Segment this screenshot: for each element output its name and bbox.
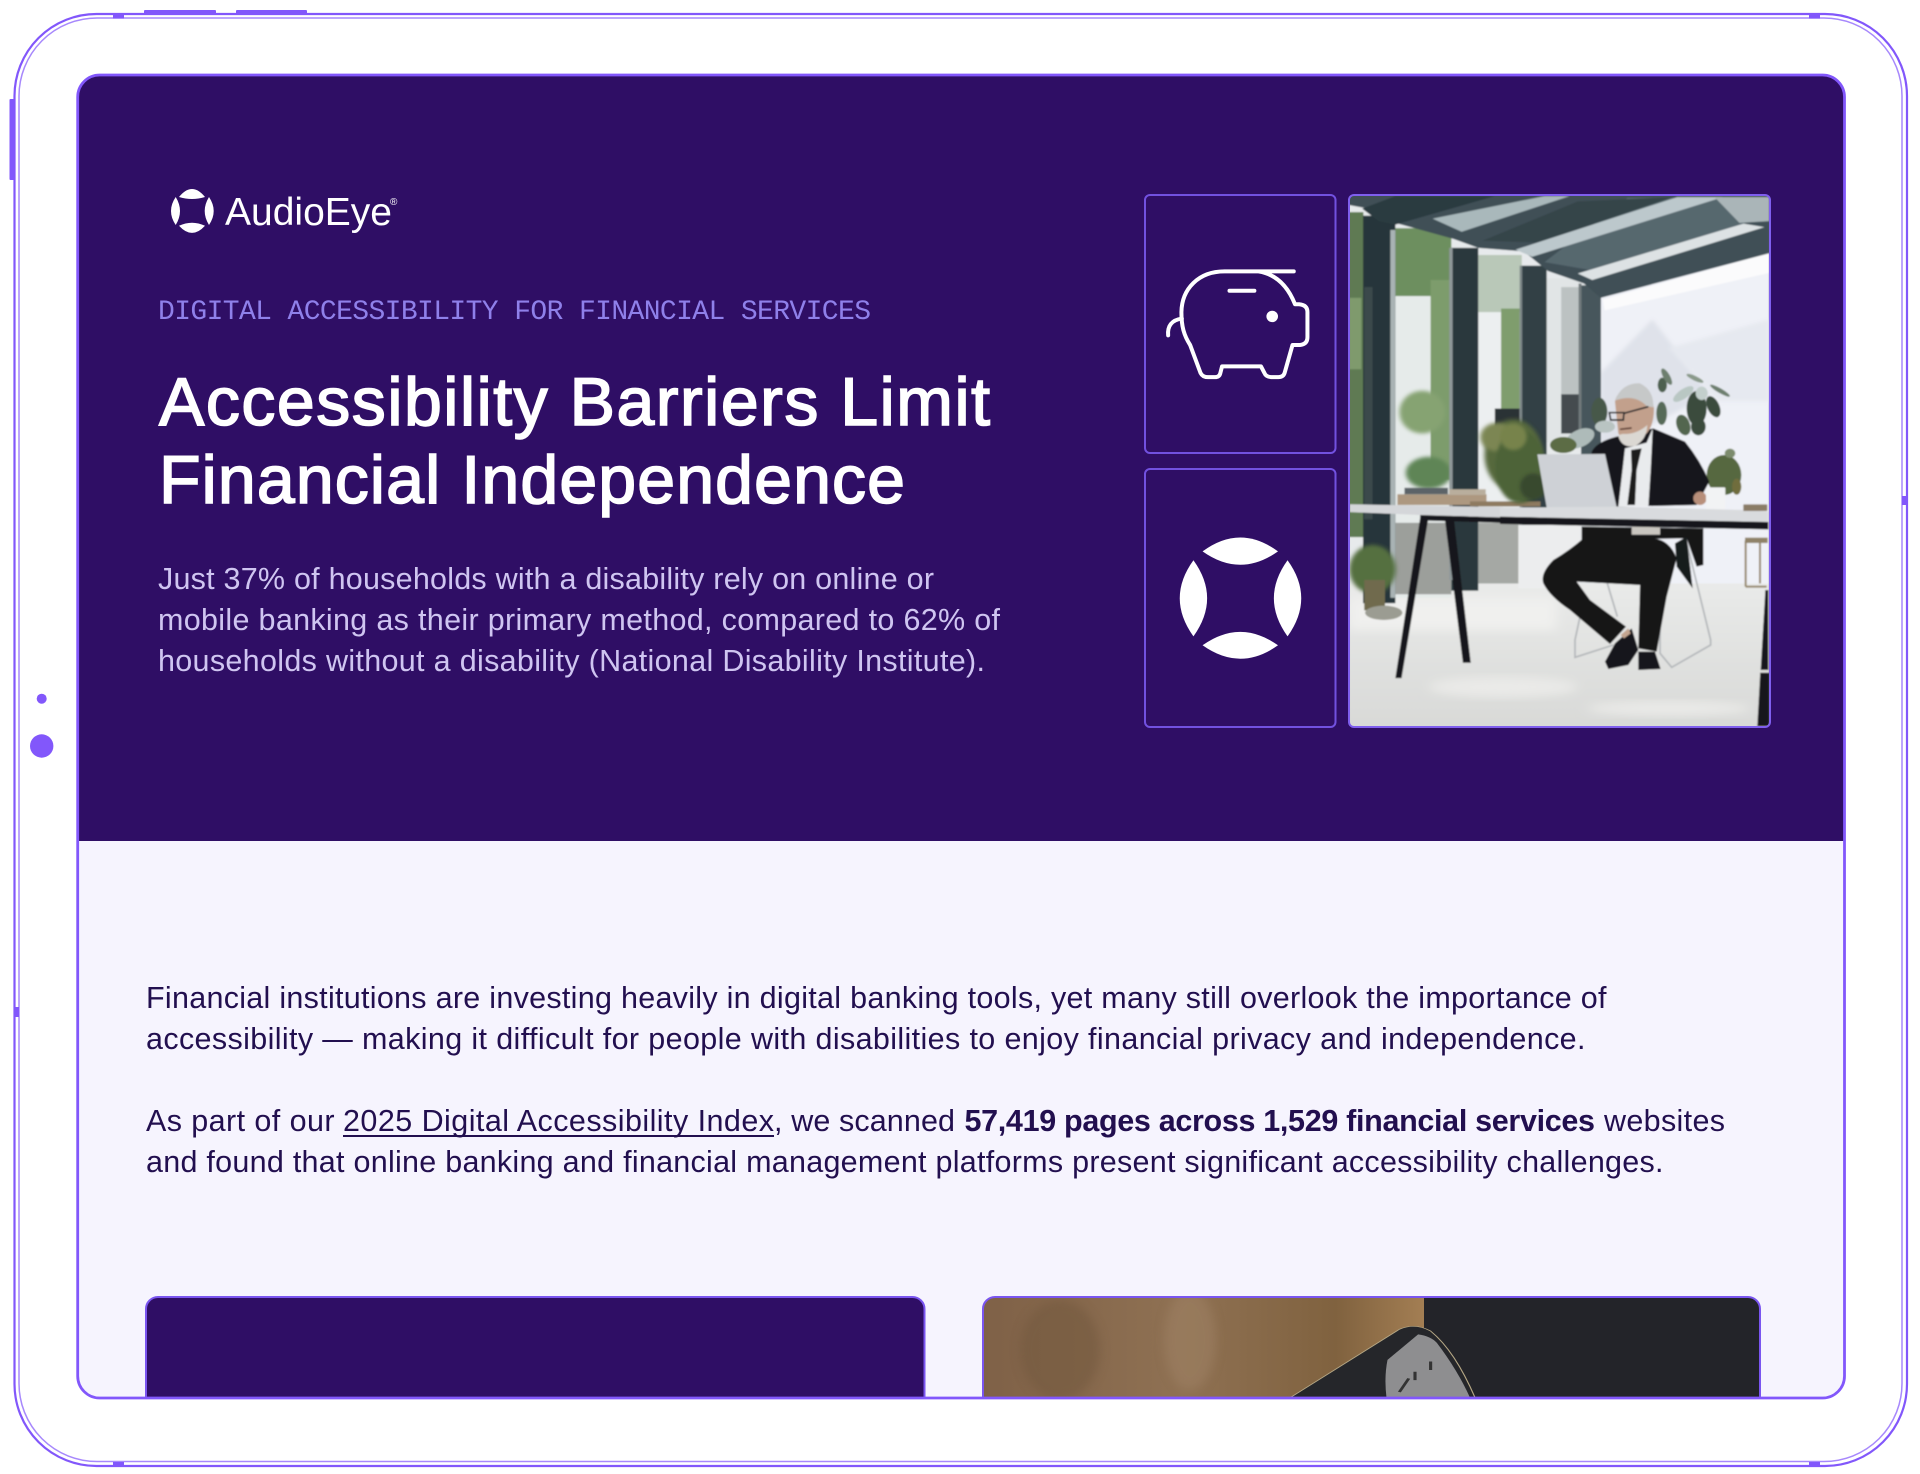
title — [159, 364, 990, 518]
chair — [1575, 528, 1711, 667]
logo: AudioEye: ® — [390, 197, 398, 208]
panel: brand mark tile — [1145, 469, 1336, 727]
hero paragraph: mobile banking as their primary method, compared to 62% of — [158, 603, 1001, 637]
shirt — [1618, 428, 1653, 507]
middle plant — [1591, 398, 1607, 426]
body text block: 2025 Digital Accessibility Index — [343, 1104, 774, 1138]
logo: AudioEye: AudioEye — [225, 191, 392, 234]
body text block: 57,419 pages across 1,529 financial services — [964, 1104, 1595, 1138]
photo: man working at a laptop — [1349, 194, 1770, 727]
body text block: As part of our — [146, 1104, 334, 1138]
right plant — [1707, 455, 1741, 495]
large plant behind man — [1656, 367, 1731, 437]
tie — [1627, 448, 1642, 505]
body text block: , we scanned — [774, 1104, 955, 1138]
plant behind desk — [1484, 419, 1543, 491]
shoes — [1605, 628, 1638, 669]
lower torso — [1582, 527, 1703, 567]
hero paragraph: households without a disability (National Disability Institute). — [158, 644, 985, 678]
hand — [1693, 492, 1707, 505]
mug — [1705, 486, 1727, 501]
jacket — [1592, 428, 1709, 507]
icon: AudioEye mark — [1180, 537, 1301, 659]
hero paragraph: Just 37% of households with a disability rely on online or — [158, 562, 934, 596]
body text block — [146, 981, 1725, 1179]
icon: piggy bank — [1168, 271, 1307, 377]
card: phone photo — [983, 1290, 1760, 1401]
planter — [1518, 524, 1548, 588]
columns — [1363, 216, 1395, 603]
legs — [1543, 538, 1677, 652]
hero paragraph — [158, 562, 1001, 678]
table left — [1350, 504, 1503, 517]
table — [1500, 507, 1768, 523]
potted plant — [1349, 545, 1396, 594]
books — [1397, 494, 1487, 505]
title: Financial Independence — [159, 442, 905, 518]
left foliage — [1495, 430, 1545, 503]
title: Accessibility Barriers Limit — [159, 364, 990, 440]
laptop — [1537, 454, 1617, 507]
body text block: websites — [1603, 1104, 1725, 1138]
wall — [1601, 253, 1769, 584]
panel: piggy bank tile — [1145, 195, 1336, 453]
ceiling — [1349, 194, 1769, 298]
eyebrow: DIGITAL ACCESSIBILITY FOR FINANCIAL SERVICES — [158, 297, 871, 328]
floor — [1349, 584, 1769, 727]
body text block: Financial institutions are investing heavily in digital banking tools, yet many still overlook the importance of — [146, 981, 1607, 1015]
card: dark stat panel — [146, 1297, 924, 1398]
head — [1614, 397, 1655, 436]
windows — [1349, 212, 1363, 537]
body text block: and found that online banking and financial management platforms present significant accessibility challenges. — [146, 1145, 1664, 1179]
body text block: accessibility — making it difficult for people with disabilities to enjoy financial privacy and independence. — [146, 1022, 1586, 1056]
shelf — [1746, 542, 1767, 587]
panel: hero — [78, 75, 1845, 841]
